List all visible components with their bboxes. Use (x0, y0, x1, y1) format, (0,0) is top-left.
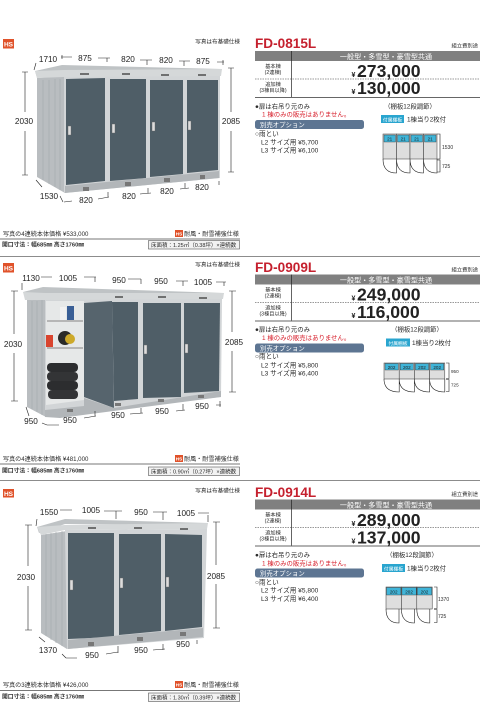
dimensions: 950 (111, 411, 125, 420)
notes and option list: L3 サイズ用 ¥6,100 (261, 146, 319, 154)
footer: price and spec: 耐風・耐雪補強仕様 (184, 230, 239, 238)
section: FD-0914L product image area (0, 486, 240, 702)
price table: (3棟目以降) (259, 86, 287, 94)
footer: price and spec: 開口寸法：幅685㎜ 高さ1760㎜ (2, 692, 84, 700)
footer: price and spec (0, 230, 240, 249)
notes and option list: 1 棟のみの販売はありません。 (262, 110, 350, 118)
price table: 137,000 (357, 528, 421, 548)
divider (0, 480, 480, 482)
dimensions: 820 (159, 56, 173, 65)
notes and option list: 別売オプション (260, 568, 305, 578)
icon: HS badge: HS (4, 266, 14, 272)
shelf info and floor plan: （棚板12段調節） (386, 550, 438, 559)
notes and option list: L3 サイズ用 ¥6,400 (261, 368, 319, 378)
dimensions: 1005 (59, 274, 78, 283)
panel: FD-0914L specs: 組立費別途 (452, 490, 479, 498)
notes and option list: L3 サイズ用 ¥6,400 (261, 594, 319, 603)
dimensions: 820 (160, 187, 174, 196)
price table: 289,000 (357, 510, 421, 530)
icon: HS badge (3, 489, 14, 498)
shelf info and floor plan: 21 (428, 136, 433, 142)
dimensions: 950 (155, 407, 169, 416)
shelf info and floor plan: （棚板12段調節） (391, 324, 443, 334)
icon: HS badge (3, 39, 14, 48)
shelf info and floor plan: 付属棚板 (384, 565, 403, 572)
shelf info and floor plan: 1棟当り2枚付 (407, 564, 447, 572)
shelf info and floor plan: 202 (418, 365, 426, 370)
shelf info and floor plan: 21 (414, 136, 420, 142)
price table: 116,000 (357, 302, 420, 322)
icon: HS badge (3, 263, 14, 272)
notes and option list: ●扉は右吊り元のみ (255, 550, 311, 559)
dimensions: 1130 (22, 274, 40, 283)
panel: FD-0914L specs (255, 485, 480, 623)
shelf info and floor plan: 202 (390, 590, 398, 594)
dimensions: 950 (176, 640, 190, 649)
shelf info and floor plan (381, 102, 453, 173)
model name: FD-0914L (255, 485, 316, 500)
price table: ¥ (352, 521, 356, 528)
notes and option list: L2 サイズ用 ¥5,700 (261, 138, 319, 146)
notes and option list (255, 550, 364, 603)
dimensions: 2085 (207, 572, 226, 581)
footer: price and spec: 床面積：1.25㎡（0.38坪）×連続数 (151, 241, 237, 249)
dimensions: 950 (154, 277, 168, 286)
notes and option list: ○雨とい (255, 130, 279, 138)
dimensions: 820 (121, 55, 135, 64)
price table: 追加棟 (265, 528, 282, 536)
footer: price and spec (0, 681, 240, 702)
dimensions: 2030 (4, 340, 23, 349)
price table: (3棟目以降) (259, 310, 287, 318)
shelf info and floor plan: 1530 (442, 145, 453, 151)
price table: (2連棟) (265, 292, 282, 300)
dimensions: 2030 (17, 573, 36, 582)
price table (255, 51, 480, 98)
shelf info and floor plan: 付属棚板 (388, 340, 408, 347)
photo note: 写真は布基礎仕様 (195, 260, 240, 268)
price table (255, 274, 480, 322)
shelf info and floor plan: 付属棚板 (383, 116, 402, 123)
footer: price and spec: 耐風・耐雪補強仕様 (184, 455, 239, 463)
photo note: 写真は布基礎仕様 (195, 38, 240, 46)
price table: (2連棟) (265, 516, 282, 524)
price table: 基本棟 (265, 286, 282, 294)
shelf info and floor plan: 21 (387, 136, 393, 142)
shelf info and floor plan: （棚板12段調節） (384, 102, 436, 110)
price table: 130,000 (357, 78, 421, 98)
photo note: 写真は布基礎仕様 (195, 486, 240, 494)
price table: 追加棟 (265, 304, 282, 312)
price table: (2連棟) (265, 68, 282, 76)
price table: ¥ (352, 313, 356, 320)
notes and option list (255, 324, 364, 378)
shelf info and floor plan: 202 (388, 365, 396, 370)
footer: price and spec: 開口寸法：幅685㎜ 高さ1760㎜ (2, 240, 84, 248)
notes and option list: ●扉は右吊り元のみ (255, 102, 311, 110)
open interior (46, 301, 84, 405)
shelf info and floor plan: 725 (451, 382, 459, 388)
shelf info and floor plan: 21 (401, 136, 406, 142)
notes and option list: 1 棟のみの販売はありません。 (262, 333, 350, 342)
dimensions: 1710 (39, 55, 58, 64)
price table: ¥ (352, 89, 356, 96)
footer: price and spec: 写真の3連続本体価格 ¥426,000 (3, 681, 89, 689)
section: FD-0815L product image area (0, 38, 241, 249)
dimensions: 1530 (40, 192, 59, 201)
notes and option list: 別売オプション (260, 344, 305, 352)
shelf info and floor plan: 202 (433, 365, 441, 370)
shelf info and floor plan: 725 (442, 164, 451, 170)
dimensions: 875 (78, 54, 92, 63)
shelf info and floor plan: 950 (451, 369, 459, 374)
price table: ¥ (352, 296, 356, 302)
footer: price and spec: 床面積：1.30㎡（0.39坪）×連続数 (151, 694, 237, 702)
notes and option list: ○雨とい (255, 352, 279, 360)
footer: price and spec: 耐風・耐雪補強仕様 (184, 681, 239, 689)
footer: price and spec: HS (176, 232, 182, 236)
dimensions: 2085 (222, 117, 241, 126)
dimensions: 1550 (40, 508, 59, 517)
price table: 追加棟 (265, 80, 282, 88)
price table: 273,000 (357, 61, 421, 81)
footer: price and spec: 写真の4連続本体価格 ¥481,000 (3, 455, 89, 463)
shelf info and floor plan: 1370 (438, 597, 449, 603)
dimensions: 950 (85, 651, 99, 660)
price table: 一般型・多雪型・豪雪型共通 (340, 500, 432, 510)
dimensions: 1005 (82, 506, 101, 515)
model name: FD-0815L (255, 36, 316, 51)
dimensions: 1005 (194, 278, 213, 287)
shelf info and floor plan: 1棟当り2枚付 (407, 114, 447, 124)
notes and option list: 別売オプション (260, 120, 305, 129)
dimensions: 950 (134, 646, 148, 655)
price table: ¥ (352, 538, 356, 546)
price table (255, 500, 480, 548)
divider (0, 256, 480, 258)
dimensions: 820 (195, 183, 209, 192)
icon: HS badge: HS (4, 42, 14, 48)
model name: FD-0909L (255, 260, 316, 275)
price table: 基本棟 (265, 62, 282, 70)
footer: price and spec: HS (176, 682, 182, 688)
shelf info and floor plan: 1棟当り2枚付 (412, 338, 452, 347)
footer: price and spec: HS (176, 456, 182, 462)
footer: price and spec: 開口寸法：幅685㎜ 高さ1760㎜ (2, 466, 84, 474)
dimensions: 950 (63, 416, 77, 425)
price table: ¥ (352, 72, 356, 79)
footer: price and spec: 床面積：0.90㎡（0.27坪）×連続数 (151, 468, 237, 476)
shelf info and floor plan (384, 324, 459, 392)
notes and option list: L2 サイズ用 ¥5,800 (261, 360, 319, 370)
illustration: three-unit shed (37, 519, 208, 649)
shelf info and floor plan (382, 550, 449, 623)
dimensions (17, 506, 226, 660)
dimensions: 820 (79, 196, 93, 205)
panel: FD-0815L specs: 組立費別途 (452, 42, 479, 50)
dimensions: 950 (134, 508, 148, 517)
notes and option list: ○雨とい (255, 578, 279, 586)
panel: FD-0909L specs: 組立費別途 (452, 266, 479, 274)
dimensions: 950 (112, 276, 126, 285)
dimensions: 950 (24, 417, 38, 426)
footer: price and spec (0, 455, 240, 476)
dimensions: 2030 (15, 117, 34, 126)
price table: 一般型・多雪型・豪雪型共通 (340, 52, 432, 61)
dimensions (15, 54, 241, 205)
icon: HS badge: HS (4, 491, 14, 498)
price table: (3棟目以降) (259, 534, 287, 542)
section: FD-0909L product image area (0, 260, 244, 476)
dimensions (4, 274, 244, 426)
dimensions: 1005 (177, 509, 196, 518)
dimensions: 2085 (225, 338, 244, 347)
shelf info and floor plan: 725 (438, 614, 447, 620)
price table: 一般型・多雪型・豪雪型共通 (340, 276, 432, 284)
shelf info and floor plan: 202 (405, 590, 413, 594)
notes and option list (255, 102, 364, 154)
notes and option list: ●扉は右吊り元のみ (255, 324, 311, 334)
notes and option list: 1 棟のみの販売はありません。 (262, 558, 350, 568)
price table: 249,000 (357, 284, 421, 304)
panel: FD-0815L specs (255, 36, 480, 173)
footer: price and spec: 写真の4連続本体価格 ¥533,000 (3, 230, 89, 238)
dimensions: 875 (196, 57, 210, 66)
dimensions: 820 (122, 192, 136, 201)
dimensions: 1370 (39, 646, 58, 655)
dimensions: 950 (195, 402, 209, 411)
shelf info and floor plan: 202 (403, 365, 411, 370)
panel: FD-0909L specs (255, 260, 480, 392)
illustration: four-unit shed (35, 65, 222, 193)
price table: 基本棟 (265, 510, 282, 518)
notes and option list: L2 サイズ用 ¥5,800 (261, 586, 319, 594)
illustration: four-unit shed with open door (23, 287, 224, 418)
shelf info and floor plan: 202 (421, 590, 429, 594)
